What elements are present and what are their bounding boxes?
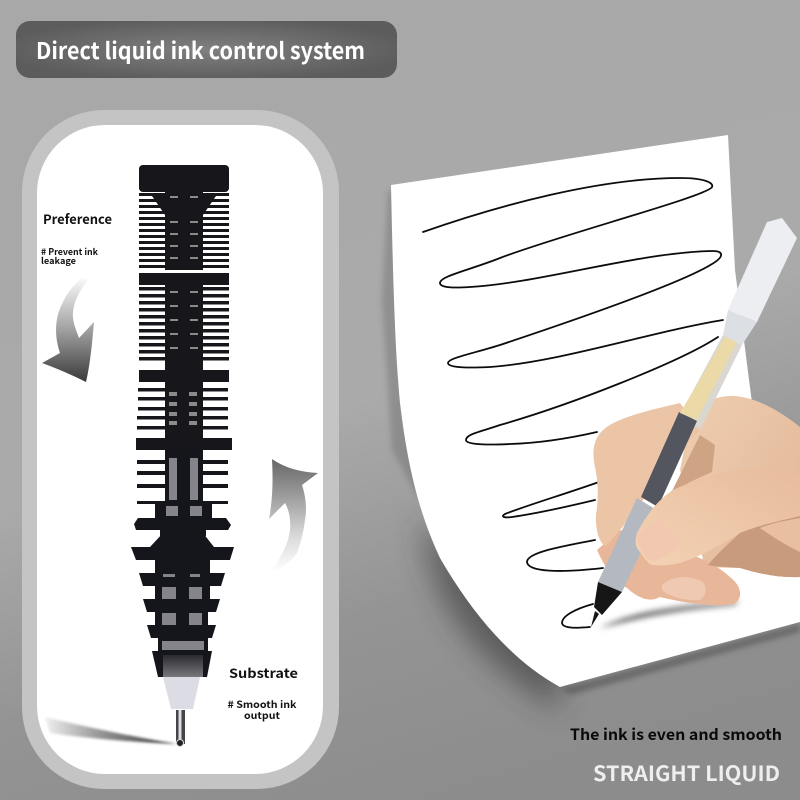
white sheet [391, 135, 800, 687]
caption: straight liquid: STRAIGHT LIQUID [593, 758, 780, 788]
arrow: downward [42, 278, 94, 382]
refill cross-section diagram [45, 165, 234, 746]
lower ribs and nozzle discs [131, 450, 234, 677]
pen: translucent grip [598, 498, 660, 592]
pen: ink barrel [641, 412, 697, 507]
cap and upper ribs [136, 165, 232, 450]
label: Preference: Preference [43, 209, 112, 228]
white nozzle tip [163, 677, 200, 709]
label: Substrate: Substrate [229, 663, 298, 682]
grey highlights in body [169, 196, 198, 425]
wrist light patch [760, 518, 800, 552]
hand shadow on paper [600, 600, 740, 628]
thumb [636, 468, 800, 565]
panel: ink refill cross-section [22, 110, 339, 789]
ink flow streak at ball [45, 717, 177, 744]
caption: ink is even and smooth: The ink is even and smooth [570, 723, 782, 745]
note: prevent ink leakage: # Prevent ink [41, 245, 99, 258]
metal needle and ball [176, 710, 185, 746]
note: prevent ink leakage: leakage [41, 254, 76, 267]
pen: translucent tube [680, 335, 742, 430]
note: smooth ink output: # Smooth ink [228, 696, 296, 711]
pen: black tip and needle [591, 582, 622, 627]
palm and back of hand [680, 396, 800, 577]
arrow: upward [269, 459, 318, 572]
pen: collar [723, 310, 757, 345]
illustration: hand holding pen [591, 218, 800, 627]
title banner: Direct liquid ink control system [36, 32, 365, 66]
paper shadow [420, 520, 560, 710]
ring and middle fingers [597, 530, 740, 605]
pen: transparent cap [728, 218, 797, 322]
note: smooth ink output: output [244, 707, 281, 722]
title banner [16, 21, 397, 78]
index finger [594, 403, 700, 546]
handwriting lines [423, 178, 723, 628]
thumb nail [637, 518, 680, 562]
palm shadow between pen and thumb [670, 435, 715, 495]
pen: kraft label [680, 337, 737, 420]
lower palm shading [708, 516, 800, 577]
panel: paper sheet with handwriting [382, 135, 800, 710]
